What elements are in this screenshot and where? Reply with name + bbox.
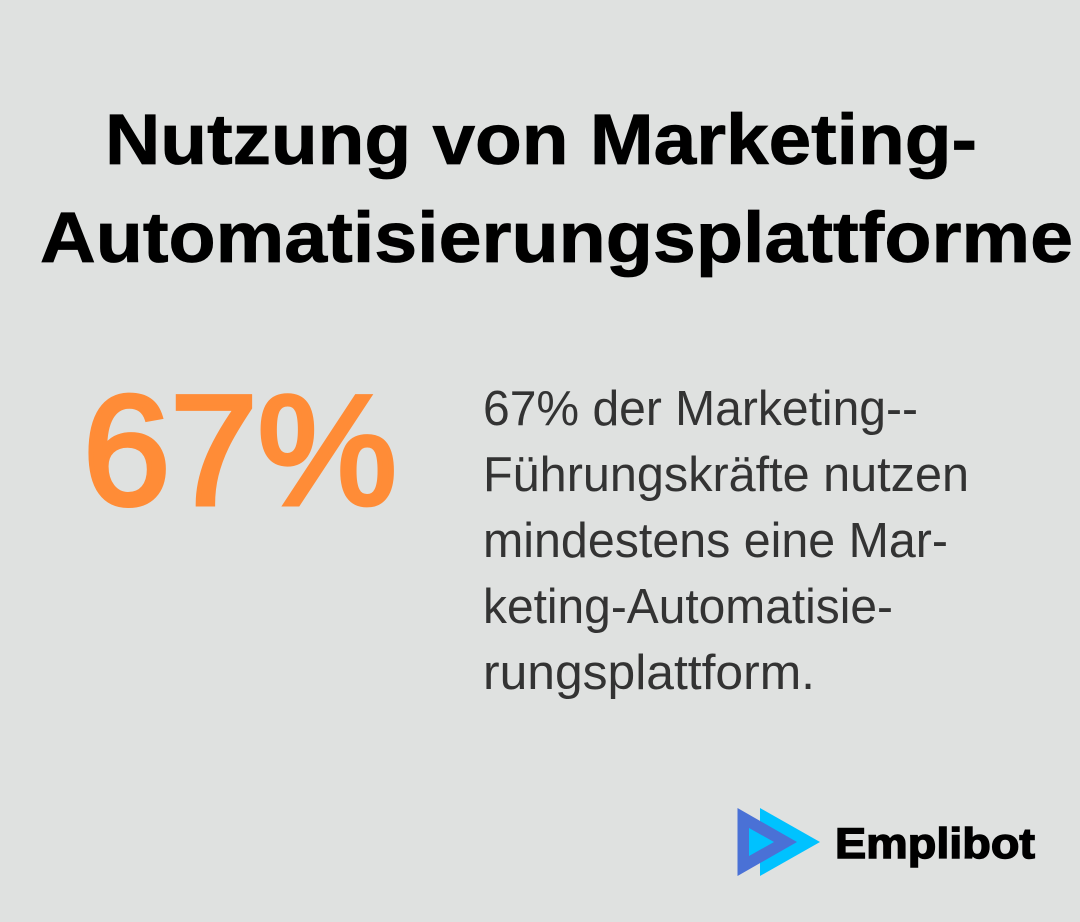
description text: Führungskräfte nutzen (483, 448, 969, 502)
description text: rungsplattform. (483, 646, 815, 700)
logo: Emplibot (738, 808, 1035, 876)
description text: 67% der Marketing-- (483, 382, 918, 436)
description text: keting-Automatisie- (483, 580, 893, 634)
title: Automatisierungsplattforme (40, 199, 1073, 278)
description text: mindestens eine Mar- (483, 514, 948, 568)
title (40, 101, 1073, 278)
logo wordmark: Emplibot (835, 820, 1035, 868)
description text (483, 382, 969, 700)
icon: play triangles (738, 808, 820, 876)
big stat: 67%: 67% (83, 364, 397, 538)
title: Nutzung von Marketing- (105, 101, 977, 180)
